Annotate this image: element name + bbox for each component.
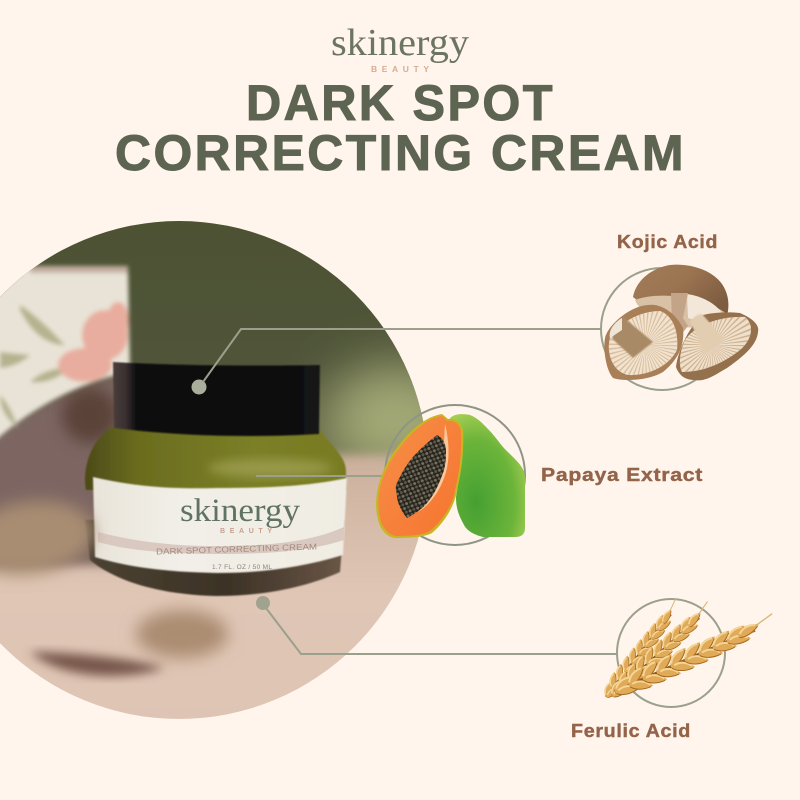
dark mauve background shape bbox=[0, 376, 114, 572]
label size: 1.7 FL. OZ / 50 ML bbox=[212, 564, 272, 571]
blurred foreground shadow bbox=[136, 610, 228, 658]
seeds bbox=[396, 435, 446, 518]
title: CORRECTING CREAM bbox=[115, 125, 686, 181]
left mushroom gills bbox=[623, 323, 667, 367]
photo background wall bbox=[0, 221, 424, 462]
label product name: DARK SPOT CORRECTING CREAM bbox=[156, 541, 317, 557]
label: Kojic Acid: Kojic Acid bbox=[617, 232, 718, 252]
box flower bbox=[58, 302, 129, 382]
brand logo: BEAUTY bbox=[371, 64, 429, 74]
dried flowers blur bbox=[62, 387, 118, 443]
jar label bbox=[93, 477, 347, 573]
blurred foreground dark streak bbox=[30, 652, 165, 676]
wheat spike left bbox=[596, 595, 688, 704]
top mushroom bbox=[633, 265, 728, 336]
label: Ferulic Acid: Ferulic Acid bbox=[571, 721, 691, 741]
cut papaya flesh bbox=[378, 416, 461, 536]
label band bbox=[98, 527, 344, 554]
right mushroom bbox=[676, 312, 758, 380]
title: DARK SPOT bbox=[246, 75, 555, 131]
ring: Papaya Extract bbox=[385, 405, 525, 545]
brand logo: skinergy bbox=[331, 22, 469, 64]
jar bbox=[85, 362, 347, 596]
title bbox=[115, 75, 686, 181]
connector: Kojic Acid bbox=[192, 329, 602, 394]
right mushroom gills bbox=[690, 323, 734, 367]
whole green papaya bbox=[450, 414, 525, 537]
product photo circle bbox=[0, 221, 424, 719]
wheat spike middle bbox=[602, 597, 719, 705]
jar lid bbox=[113, 362, 320, 436]
icon: wheat bbox=[596, 595, 781, 705]
connector: Papaya Extract bbox=[256, 475, 386, 477]
jar highlight bbox=[208, 459, 332, 477]
jar shoulder bbox=[85, 427, 346, 490]
tabletop bbox=[0, 455, 440, 730]
wheat spike right bbox=[607, 606, 781, 705]
cut papaya pale core bbox=[418, 424, 449, 512]
connector: Ferulic Acid bbox=[256, 596, 618, 654]
left mushroom bbox=[604, 305, 683, 380]
label beauty: BEAUTY bbox=[220, 528, 272, 535]
ring: Ferulic Acid bbox=[617, 599, 725, 707]
box leaf decorations bbox=[0, 305, 70, 428]
cut papaya half skin bbox=[376, 414, 463, 538]
ring: Kojic Acid bbox=[601, 268, 723, 390]
label: Papaya Extract: Papaya Extract bbox=[541, 465, 703, 485]
icon: mushrooms bbox=[604, 265, 758, 380]
icon: papaya bbox=[376, 414, 525, 538]
grass plume bbox=[0, 493, 98, 583]
wall light glow bbox=[319, 338, 424, 460]
label logo: skinergy bbox=[180, 493, 301, 529]
gift box bbox=[0, 266, 130, 445]
jar base bbox=[85, 520, 344, 596]
